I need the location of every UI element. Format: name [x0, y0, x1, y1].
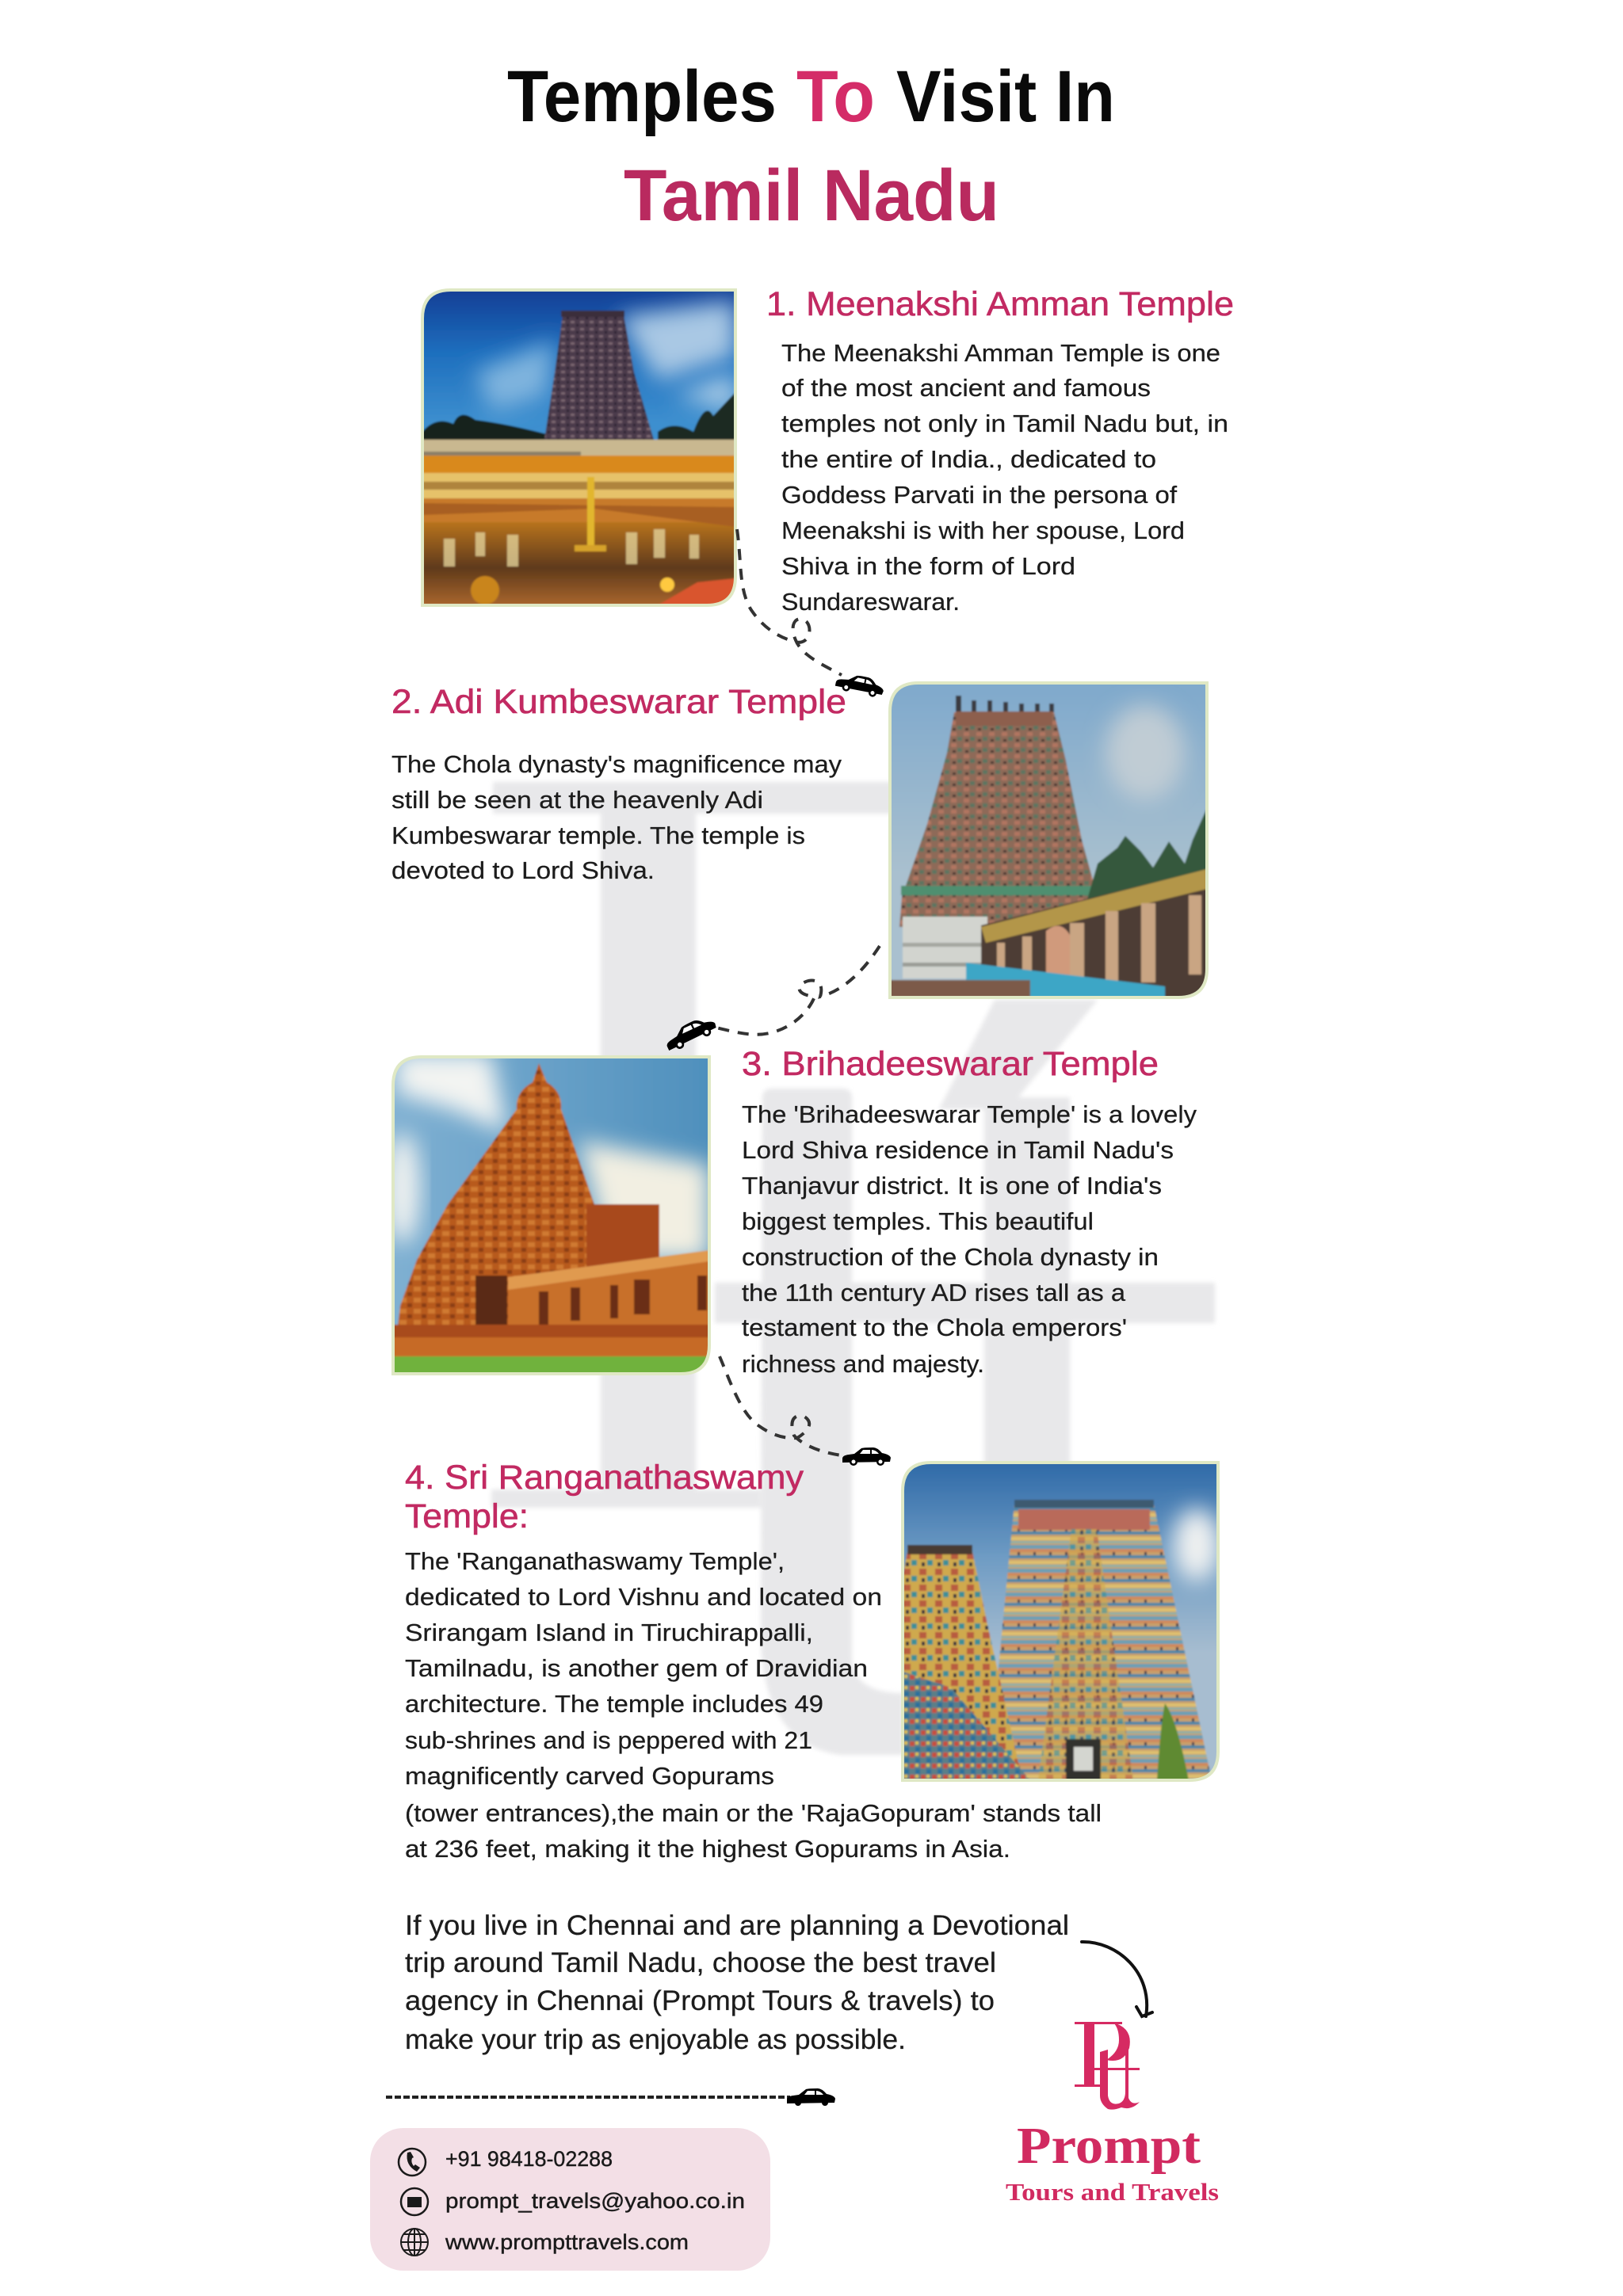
- text block 4: sub-shrines and is peppered with 21: [405, 1726, 812, 1754]
- title: Visit In: [896, 56, 1115, 137]
- title: [507, 56, 1115, 236]
- text block 1: Meenakshi is with her spouse, Lord: [781, 517, 1185, 544]
- heading 4: 4. Sri Ranganathaswamy: [405, 1459, 804, 1497]
- phone number: +91 98418-02288: [445, 2147, 613, 2171]
- photo 2: Adi Kumbeswarar Temple: [890, 683, 1207, 998]
- text block 4: The 'Ranganathaswamy Temple',: [405, 1547, 785, 1575]
- closing paragraph: If you live in Chennai and are planning a Devotional: [405, 1910, 1069, 1941]
- photo 4: Sri Ranganathaswamy Temple: [903, 1463, 1220, 1780]
- text block 3: biggest temples. This beautiful: [742, 1207, 1094, 1235]
- closing paragraph: [405, 1910, 1069, 2055]
- text block 1: of the most ancient and famous: [781, 374, 1151, 402]
- text block 2: Kumbeswarar temple. The temple is: [391, 822, 805, 849]
- title: Tamil Nadu: [624, 155, 999, 236]
- heading 2: 2. Adi Kumbeswarar Temple: [391, 683, 846, 721]
- icon: car: [834, 671, 885, 699]
- text block 2: The Chola dynasty's magnificence may: [391, 750, 842, 778]
- icon: car: [842, 1447, 891, 1466]
- icon: globe: [401, 2229, 428, 2256]
- logo wordmark: [1006, 2117, 1219, 2206]
- text block 3: The 'Brihadeeswarar Temple' is a lovely: [742, 1100, 1197, 1128]
- text block 3: construction of the Chola dynasty in: [742, 1243, 1159, 1271]
- text block 4: magnificently carved Gopurams: [405, 1762, 774, 1790]
- website: www.prompttravels.com: [445, 2230, 689, 2254]
- text block 1: Goddess Parvati in the persona of: [781, 481, 1177, 509]
- contact panel: [370, 2128, 770, 2271]
- heading 4: [405, 1459, 804, 1535]
- logo wordmark: Tours and Travels: [1006, 2178, 1219, 2206]
- text block 4: [405, 1547, 1102, 1863]
- heading 3: 3. Brihadeeswarar Temple: [742, 1045, 1159, 1083]
- text block 1: [781, 339, 1228, 616]
- logo wordmark: Prompt: [1017, 2117, 1201, 2175]
- text block 1: temples not only in Tamil Nadu but, in: [781, 410, 1228, 437]
- dashed road with car: [386, 2088, 835, 2106]
- connector road 2 with car: [662, 946, 880, 1054]
- icon: email: [401, 2188, 428, 2215]
- photo 3: Brihadeeswarar Temple: [385, 1054, 709, 1374]
- title: Temples: [507, 56, 777, 137]
- text block 1: Sundareswarar.: [781, 588, 960, 616]
- text block 3: Thanjavur district. It is one of India's: [742, 1172, 1162, 1199]
- icon: phone: [399, 2149, 426, 2176]
- text block 1: The Meenakshi Amman Temple is one: [781, 339, 1220, 367]
- text block 1: the entire of India., dedicated to: [781, 445, 1156, 473]
- closing paragraph: make your trip as enjoyable as possible.: [405, 2024, 906, 2055]
- closing paragraph: trip around Tamil Nadu, choose the best travel: [405, 1947, 996, 1978]
- text block 2: devoted to Lord Shiva.: [391, 856, 655, 884]
- text block 3: the 11th century AD rises tall as a: [742, 1279, 1126, 1306]
- text block 2: still be seen at the heavenly Adi: [391, 786, 763, 814]
- icon: car: [787, 2088, 835, 2106]
- text block 4: dedicated to Lord Vishnu and located on: [405, 1583, 882, 1611]
- connector road 1 with car: [737, 529, 885, 699]
- text block 4: (tower entrances),the main or the 'RajaGopuram' stands tall: [405, 1799, 1102, 1827]
- icon: car: [662, 1013, 719, 1054]
- text block 3: [742, 1100, 1197, 1378]
- text block 4: Srirangam Island in Tiruchirappalli,: [405, 1619, 813, 1646]
- text block 4: at 236 feet, making it the highest Gopurams in Asia.: [405, 1835, 1010, 1863]
- text block 4: architecture. The temple includes 49: [405, 1690, 823, 1718]
- email address: prompt_travels@yahoo.co.in: [445, 2189, 745, 2213]
- text block 2: [391, 750, 842, 884]
- title: To: [796, 56, 875, 137]
- text block 3: richness and majesty.: [742, 1350, 984, 1378]
- text block 4: Tamilnadu, is another gem of Dravidian: [405, 1654, 868, 1682]
- text block 3: Lord Shiva residence in Tamil Nadu's: [742, 1136, 1174, 1164]
- logo monogram: [1075, 2022, 1140, 2110]
- text block 1: Shiva in the form of Lord: [781, 552, 1075, 580]
- photo 1: Meenakshi Amman Temple: [422, 290, 735, 605]
- connector road 3 with car: [720, 1356, 891, 1466]
- closing paragraph: agency in Chennai (Prompt Tours & travels) to: [405, 1985, 995, 2016]
- arrow to logo: [1082, 1942, 1152, 2016]
- watermark monogram: [491, 782, 1215, 1755]
- heading 1: 1. Meenakshi Amman Temple: [766, 285, 1234, 323]
- heading 4: Temple:: [405, 1497, 529, 1535]
- text block 3: testament to the Chola emperors': [742, 1314, 1127, 1341]
